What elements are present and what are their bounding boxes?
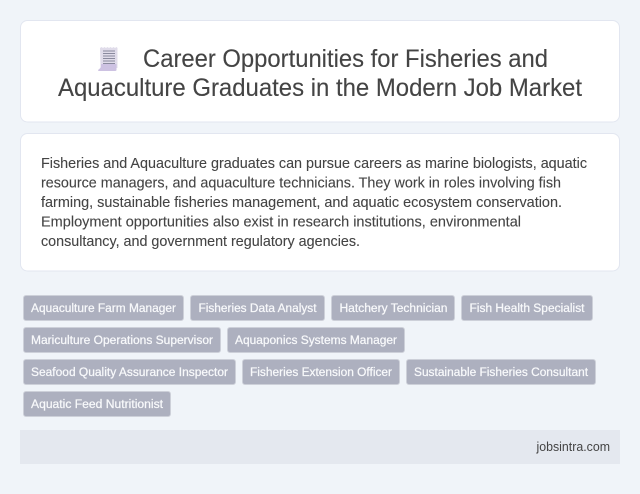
tag: Mariculture Operations Supervisor: [31, 333, 213, 347]
tag: [242, 360, 400, 384]
tag: [24, 360, 236, 384]
tag: [24, 328, 220, 352]
title text: Aquaculture Graduates in the Modern Job Market: [58, 74, 582, 102]
footer bar: [20, 430, 620, 464]
tag: [190, 296, 324, 320]
panel: title header: [20, 20, 620, 122]
description text: farming, sustainable fisheries management, and aquatic ecosystem conservation.: [41, 195, 562, 211]
tag: [24, 392, 170, 416]
icon: scroll document: [98, 47, 118, 71]
title text: Career Opportunities for Fisheries and: [143, 45, 548, 73]
description text: consultancy, and government regulatory agencies.: [41, 234, 360, 250]
tag: [406, 360, 596, 384]
panel: description: [20, 134, 620, 271]
tag: Fisheries Data Analyst: [198, 301, 317, 315]
footer source text: jobsintra.com: [536, 440, 610, 454]
tag: [462, 296, 592, 320]
description text: Employment opportunities also exist in research institutions, environmental: [41, 214, 521, 230]
tag: [24, 296, 184, 320]
description text: resource managers, and aquaculture technicians. They work in roles involving fish: [41, 176, 561, 192]
tag: Hatchery Technician: [340, 301, 448, 315]
tag: [228, 328, 404, 352]
tag: Aquatic Feed Nutritionist: [31, 397, 164, 411]
tag: Fish Health Specialist: [470, 301, 585, 315]
tag: Aquaponics Systems Manager: [235, 333, 397, 347]
tag: [332, 296, 454, 320]
panel: job title tags: [24, 296, 596, 416]
tag: Sustainable Fisheries Consultant: [414, 365, 589, 379]
tag: Seafood Quality Assurance Inspector: [31, 365, 228, 379]
description text: Fisheries and Aquaculture graduates can pursue careers as marine biologists, aquatic: [41, 156, 587, 172]
tag: Fisheries Extension Officer: [250, 365, 392, 379]
tag: Aquaculture Farm Manager: [31, 301, 176, 315]
